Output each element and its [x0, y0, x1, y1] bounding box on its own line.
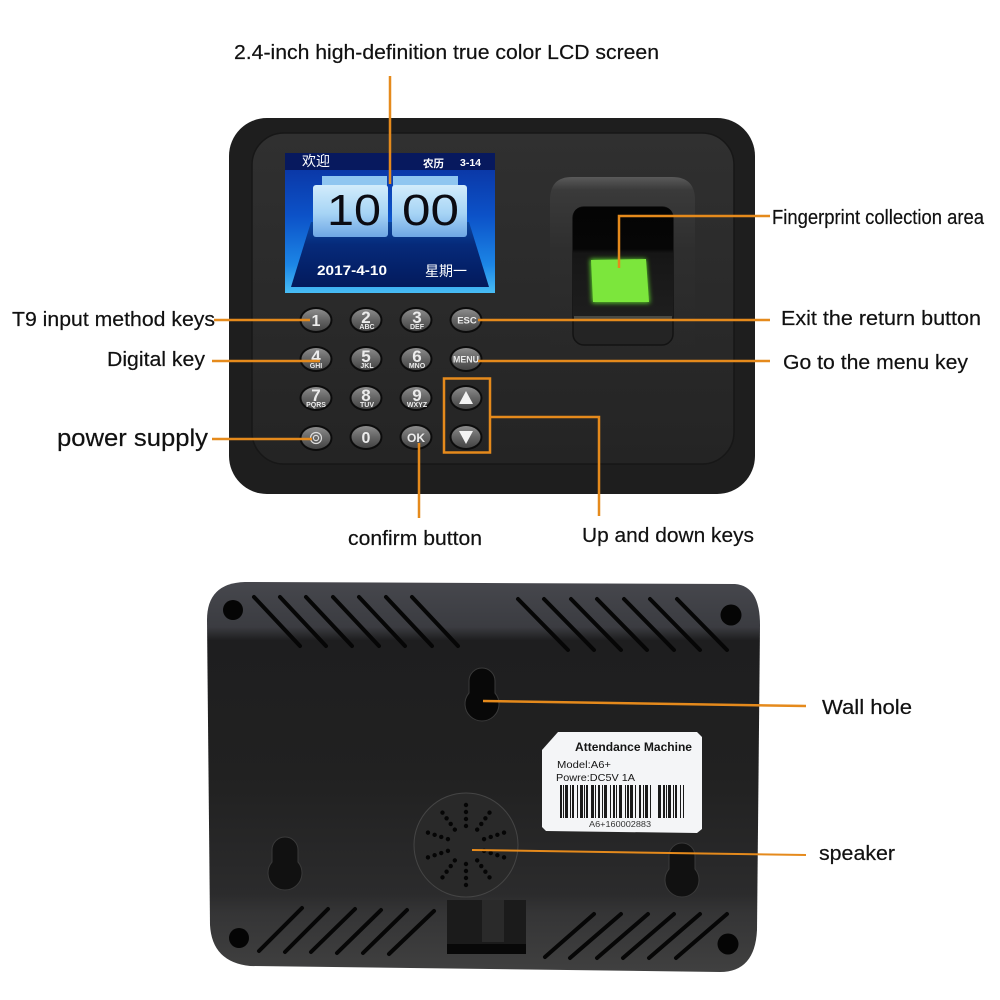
- label: fingerprint area: Fingerprint collection area: [772, 207, 985, 229]
- up and down keys box: [444, 378, 490, 452]
- keypad: [300, 307, 482, 451]
- key 2: [350, 307, 382, 333]
- key power: [300, 425, 332, 451]
- key MENU: [450, 346, 482, 372]
- label: confirm button: confirm button: [348, 528, 482, 550]
- bottom left vents: [259, 908, 434, 954]
- key 0: [350, 424, 382, 450]
- exit button leader: [478, 319, 770, 321]
- device inner face: [252, 133, 734, 464]
- screw holes: [223, 600, 742, 954]
- wall hole left: [268, 837, 302, 890]
- key 8: 8: [361, 386, 371, 405]
- key 7: PQRS: [306, 402, 326, 409]
- fingerprint leader: [619, 216, 770, 268]
- key 7: 7: [311, 386, 321, 405]
- menu key leader: [478, 360, 770, 362]
- back device: [207, 582, 760, 972]
- date: 2017-4-10: [317, 262, 387, 278]
- label: exit button: Exit the return button: [781, 308, 981, 330]
- key 5: 5: [361, 347, 371, 366]
- speaker grille: [414, 793, 518, 897]
- key up arrow: [450, 385, 482, 411]
- key down arrow: [450, 424, 482, 450]
- left flip card: [313, 185, 388, 237]
- green sensor: [591, 259, 649, 302]
- screen top bar: [285, 153, 495, 170]
- T9 keys leader: [214, 319, 310, 321]
- key OK: OK: [407, 431, 425, 445]
- label: up and down keys: Up and down keys: [582, 525, 754, 547]
- key 3: DEF: [410, 324, 425, 331]
- bottom right vents: [545, 914, 727, 958]
- key 1: [300, 307, 332, 333]
- key 1: 1: [312, 313, 321, 330]
- label: power supply: power supply: [57, 425, 208, 452]
- sensor glow: [590, 259, 650, 303]
- key 8: TUV: [360, 402, 374, 409]
- wall hole right: [665, 843, 699, 897]
- key 0: 0: [362, 430, 371, 447]
- label title: Attendance Machine: [575, 742, 692, 754]
- key 2: ABC: [359, 324, 375, 331]
- key 9: [400, 385, 432, 411]
- fingerprint housing: [550, 177, 695, 360]
- key 2: 2: [361, 308, 371, 327]
- label: LCD screen: 2.4-inch high-definition true color LCD screen: [234, 42, 659, 64]
- key 6: [400, 346, 432, 372]
- key OK: [400, 424, 432, 450]
- fingerprint window: [573, 207, 673, 345]
- key 4: GHI: [310, 363, 322, 370]
- weekday: 星期一: [425, 263, 467, 279]
- wall hole top: [465, 668, 499, 721]
- key 4: [300, 346, 332, 372]
- top left vents: [254, 597, 458, 646]
- device outer shell: [229, 118, 755, 494]
- key ESC: ESC: [457, 316, 477, 326]
- key MENU: MENU: [453, 354, 479, 364]
- key 9: WXYZ: [407, 402, 428, 409]
- LCD screen leader: [389, 76, 391, 184]
- right flip card: [392, 185, 467, 237]
- key 3: [400, 307, 432, 333]
- barcode: [560, 785, 684, 818]
- lunar calendar label: 农历: [423, 157, 444, 170]
- key 7: [300, 385, 332, 411]
- speaker leader: [472, 850, 806, 855]
- label: wall hole: Wall hole: [822, 697, 912, 719]
- key 9: 9: [412, 386, 422, 405]
- key 6: MNO: [409, 363, 426, 370]
- digital key leader: [212, 360, 320, 362]
- welcome text: 欢迎: [302, 153, 330, 169]
- product label: [542, 732, 702, 833]
- key ESC: [450, 307, 482, 333]
- top right vents: [518, 599, 727, 650]
- wall hole leader: [483, 701, 806, 706]
- barcode number: A6+160002883: [589, 820, 652, 829]
- back flip cards: [322, 176, 458, 190]
- front device: [229, 118, 755, 494]
- clock hours: 10: [327, 186, 381, 235]
- leader lines: [212, 76, 806, 855]
- label: digital key: Digital key: [107, 349, 205, 371]
- label: speaker: speaker: [819, 843, 895, 865]
- clock minutes: 00: [402, 186, 459, 235]
- key 5: [350, 346, 382, 372]
- confirm button leader: [418, 443, 420, 518]
- label power: Powre:DC5V 1A: [556, 772, 635, 784]
- key 6: 6: [412, 347, 422, 366]
- key 8: [350, 385, 382, 411]
- power supply leader: [212, 438, 312, 440]
- lunar date: 3-14: [460, 157, 481, 169]
- screen trapezoid: [291, 222, 489, 287]
- LCD screen: [285, 153, 495, 293]
- label model: Model:A6+: [557, 759, 611, 771]
- up and down keys leader: [490, 417, 599, 516]
- label: T9 keys: T9 input method keys: [12, 309, 215, 331]
- key 4: 4: [311, 347, 321, 366]
- power port recess: [447, 900, 526, 954]
- back shell: [207, 582, 760, 972]
- label: menu key: Go to the menu key: [783, 352, 968, 374]
- key 3: 3: [412, 308, 422, 327]
- key 5: JKL: [360, 363, 374, 370]
